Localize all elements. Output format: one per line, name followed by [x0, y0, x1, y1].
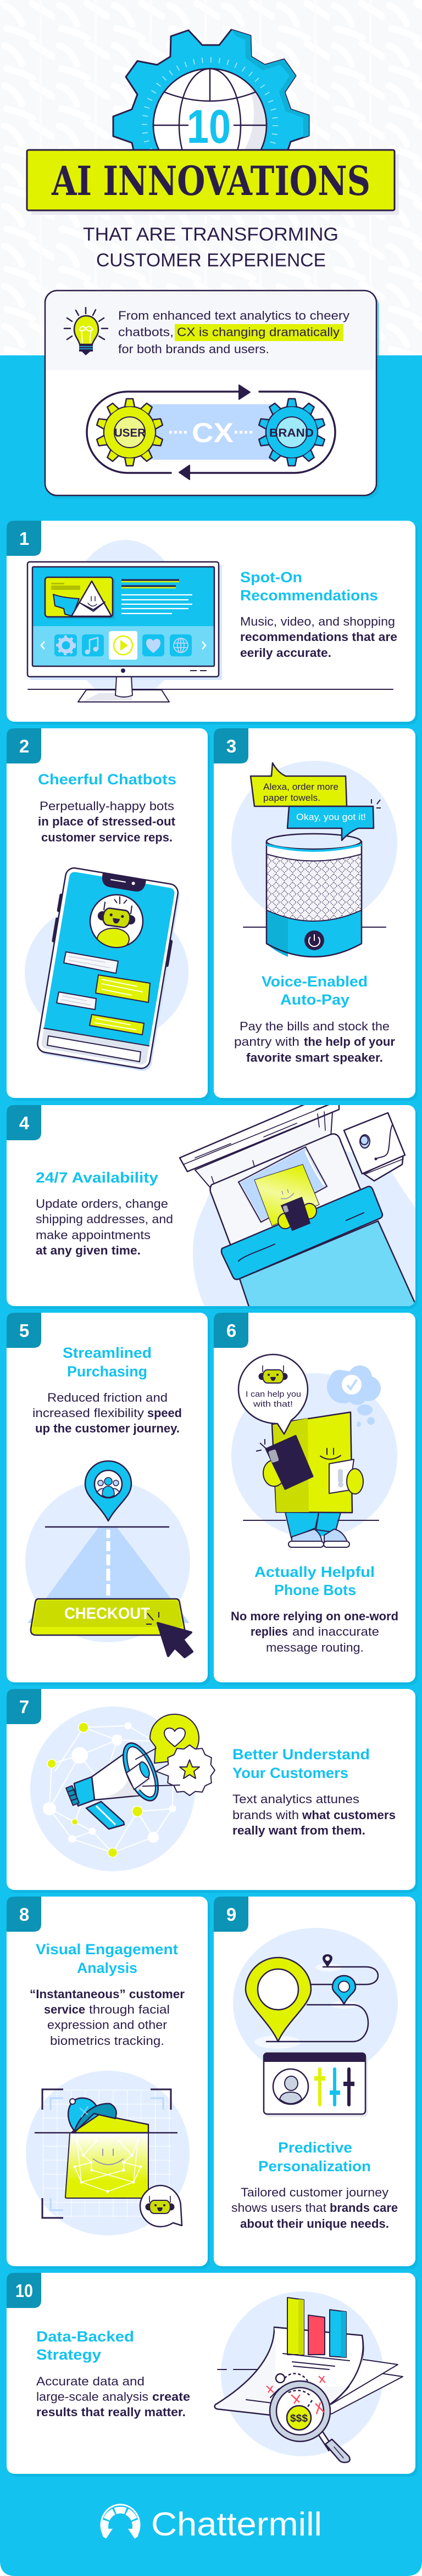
body text: [36, 1197, 173, 1257]
number badge 9: [214, 1897, 248, 1932]
number badge 3: [214, 728, 248, 763]
number badge 6: 6: [226, 1320, 236, 1341]
heading: Purchasing: [67, 1363, 147, 1380]
diagram: user brand CX loop: CX: [192, 417, 234, 448]
panel: card 2: [7, 728, 210, 1101]
speech bubble: alexa: paper towels.: [263, 793, 320, 803]
body text: Reduced friction and: [47, 1391, 168, 1404]
body text: “Instantaneous” customer: [30, 1987, 185, 2001]
illustration: face scan: [35, 2089, 177, 2218]
number badge 5: [7, 1313, 41, 1348]
heading: Streamlined: [63, 1345, 152, 1361]
heading: [254, 1564, 375, 1598]
body text: [36, 2374, 190, 2419]
icon: location pin: [85, 1461, 131, 1521]
footer logo: Chattermill: [101, 2505, 322, 2542]
speech bubble: can help: with that!: [253, 1399, 293, 1409]
body text: shows users that: [231, 2201, 326, 2215]
panel: card 6: [214, 1313, 418, 1685]
body text: Perpetually-happy bots: [40, 799, 174, 813]
panel: card 7: [7, 1689, 418, 1893]
number badge 10: 10: [15, 2281, 33, 2301]
heading: Auto-Pay: [280, 991, 349, 1008]
body text: really want from them.: [232, 1824, 365, 1837]
icon: brand gear: [258, 399, 325, 466]
icon: user gear: USER: [114, 427, 146, 439]
icon: user gear: [96, 399, 163, 466]
illustration: network: [43, 1722, 176, 1858]
heading: [232, 1746, 370, 1781]
diagram: user brand CX loop: [87, 385, 335, 479]
heading: Cheerful Chatbots: [38, 771, 176, 788]
body text: and inaccurate: [292, 1625, 379, 1638]
body text: Accurate data and: [36, 2374, 145, 2388]
intro text: From enhanced text analytics to cheery: [118, 309, 349, 322]
heading: 24/7 Availability: [36, 1169, 158, 1186]
body text: [234, 1019, 395, 1064]
body text: [231, 2185, 398, 2231]
body text: Update orders, change: [36, 1197, 168, 1211]
icon: smart speaker: [243, 834, 386, 957]
button: checkout: CHECKOUT: [64, 1605, 150, 1622]
heading: Recommendations: [240, 587, 378, 604]
icon: gear with globe: 10: [187, 101, 231, 153]
icon: phone with chat: [33, 866, 182, 1072]
subtitle: THAT ARE TRANSFORMING: [83, 224, 338, 245]
body text: [240, 615, 397, 660]
speech bubble: okay: [287, 799, 381, 840]
icon: magnifying glass: $$$: [290, 2413, 308, 2424]
icon: badge star: [156, 1745, 215, 1796]
title banner: [27, 150, 399, 215]
subtitle: CUSTOMER EXPERIENCE: [96, 250, 326, 271]
body text: shipping addresses, and: [36, 1212, 173, 1226]
body text: pantry with: [234, 1035, 299, 1049]
heading: Analysis: [77, 1960, 137, 1976]
header background: [0, 0, 422, 363]
panel: card 10: [7, 2273, 418, 2477]
number badge 8: [7, 1897, 41, 1932]
number badge 1: [7, 521, 41, 556]
body text: biometrics tracking.: [50, 2034, 164, 2048]
heading: [36, 2328, 134, 2363]
number badge 7: [7, 1689, 41, 1724]
panel: card 5: [7, 1313, 210, 1685]
body text: favorite smart speaker.: [246, 1051, 383, 1064]
body text: about their unique needs.: [240, 2217, 389, 2231]
footer logo: Chattermill: Chattermill: [151, 2506, 322, 2542]
intro text: CX is changing dramatically: [177, 325, 340, 339]
body text: [232, 1792, 396, 1837]
speech bubble: alexa: Alexa, order more: [263, 782, 338, 792]
heading: [262, 973, 368, 1008]
heading: Voice-Enabled: [262, 973, 368, 990]
icon: speech bubble heart: [150, 1714, 199, 1763]
number badge 5: 5: [19, 1320, 29, 1341]
icon: magnifying glass: [270, 2381, 350, 2462]
icon: brand gear: BRAND: [269, 427, 314, 439]
heading: Data-Backed: [36, 2328, 134, 2345]
illustration: report chart: [215, 2298, 403, 2415]
body text: increased flexibility: [32, 1406, 144, 1420]
panel: card 4: [7, 1101, 422, 1318]
body text: No more relying on one-word: [231, 1609, 398, 1623]
body text: up the customer journey.: [35, 1421, 180, 1435]
body text: at any given time.: [36, 1244, 141, 1257]
heading: [258, 2139, 371, 2174]
heading: [36, 1941, 178, 1976]
heading: Actually Helpful: [254, 1564, 375, 1580]
icon: thought cloud: [327, 1365, 381, 1427]
body text: recommendations that are: [240, 630, 397, 644]
body text: large-scale analysis: [36, 2390, 148, 2404]
icon: gear with globe: [113, 30, 309, 191]
heading: Your Customers: [232, 1765, 348, 1781]
heading: [63, 1345, 152, 1380]
panel: intro: [45, 291, 379, 499]
panel: card 3: [214, 728, 418, 1101]
number badge 9: 9: [226, 1904, 236, 1925]
icon: cursor: [146, 1612, 193, 1659]
number badge 8: 8: [19, 1904, 29, 1925]
body text: replies: [251, 1625, 288, 1638]
intro text: [118, 309, 349, 356]
body text: expression and other: [47, 2018, 167, 2032]
icon: chattermill mark: [101, 2505, 140, 2539]
number badge 2: [7, 728, 41, 763]
body text: Text analytics attunes: [232, 1792, 359, 1806]
body text: make appointments: [36, 1228, 151, 1242]
subtitle: [83, 224, 338, 271]
icon: monitor: [27, 562, 393, 702]
body text: customer service reps.: [41, 830, 173, 844]
number badge 4: 4: [19, 1113, 30, 1133]
body text: Tailored customer journey: [241, 2185, 388, 2199]
illustration: road and checkout: [27, 1461, 193, 1659]
body text: [32, 1391, 182, 1435]
number badge 6: [214, 1313, 248, 1348]
illustration: journey pins: [246, 1954, 378, 2049]
icon: megaphone: [66, 1738, 180, 1829]
body text: [38, 799, 176, 844]
intro text: chatbots,: [118, 325, 174, 339]
speech bubble: alexa: [251, 763, 347, 806]
body text: Pay the bills and stock the: [240, 1019, 390, 1033]
body text: message routing.: [266, 1641, 364, 1654]
number badge 1: 1: [19, 528, 29, 549]
button: checkout: [31, 1599, 185, 1635]
body text: [30, 1987, 185, 2048]
heading: Visual Engagement: [36, 1941, 178, 1958]
body text: Music, video, and shopping: [240, 615, 395, 628]
icon: light bulb: [64, 308, 108, 355]
illustration: bed: [180, 1101, 422, 1318]
panel: card 9: [214, 1897, 418, 2269]
body text: the help of your: [304, 1035, 395, 1049]
number badge 10: [7, 2273, 41, 2308]
body text: eerily accurate.: [240, 646, 331, 660]
body text: through facial: [89, 2003, 170, 2016]
body text: service: [44, 2003, 85, 2016]
illustration: character with phone: [243, 1412, 379, 1547]
body text: what customers: [302, 1808, 396, 1822]
body text: speed: [147, 1406, 182, 1420]
intro text: for both brands and users.: [118, 342, 269, 356]
heading: Phone Bots: [274, 1582, 356, 1598]
speech bubble: can help: [238, 1354, 308, 1434]
body text: in place of stressed-out: [38, 815, 176, 828]
number badge 4: [7, 1105, 41, 1140]
heading: Personalization: [258, 2158, 371, 2174]
heading: Spot-On: [240, 569, 302, 586]
speech bubble: okay: Okay, you got it!: [296, 812, 366, 822]
number badge 3: 3: [226, 736, 236, 756]
body text: create: [152, 2390, 190, 2404]
heading: [240, 569, 378, 604]
body text: brands with: [232, 1808, 299, 1822]
number badge 2: 2: [19, 736, 29, 756]
heading: Strategy: [36, 2346, 101, 2363]
heading: Predictive: [278, 2139, 352, 2156]
body text: brands care: [330, 2201, 398, 2215]
speech bubble: can help: I can help you: [246, 1390, 301, 1399]
panel: card 1: [7, 521, 418, 724]
speech bubble: bot: [140, 2185, 182, 2227]
number badge 7: 7: [19, 1697, 29, 1717]
panel: card 8: [7, 1897, 210, 2269]
heading: Better Understand: [232, 1746, 370, 1763]
illustration: settings panel: [264, 2053, 368, 2117]
body text: results that really matter.: [36, 2405, 186, 2419]
body text: [231, 1609, 398, 1654]
